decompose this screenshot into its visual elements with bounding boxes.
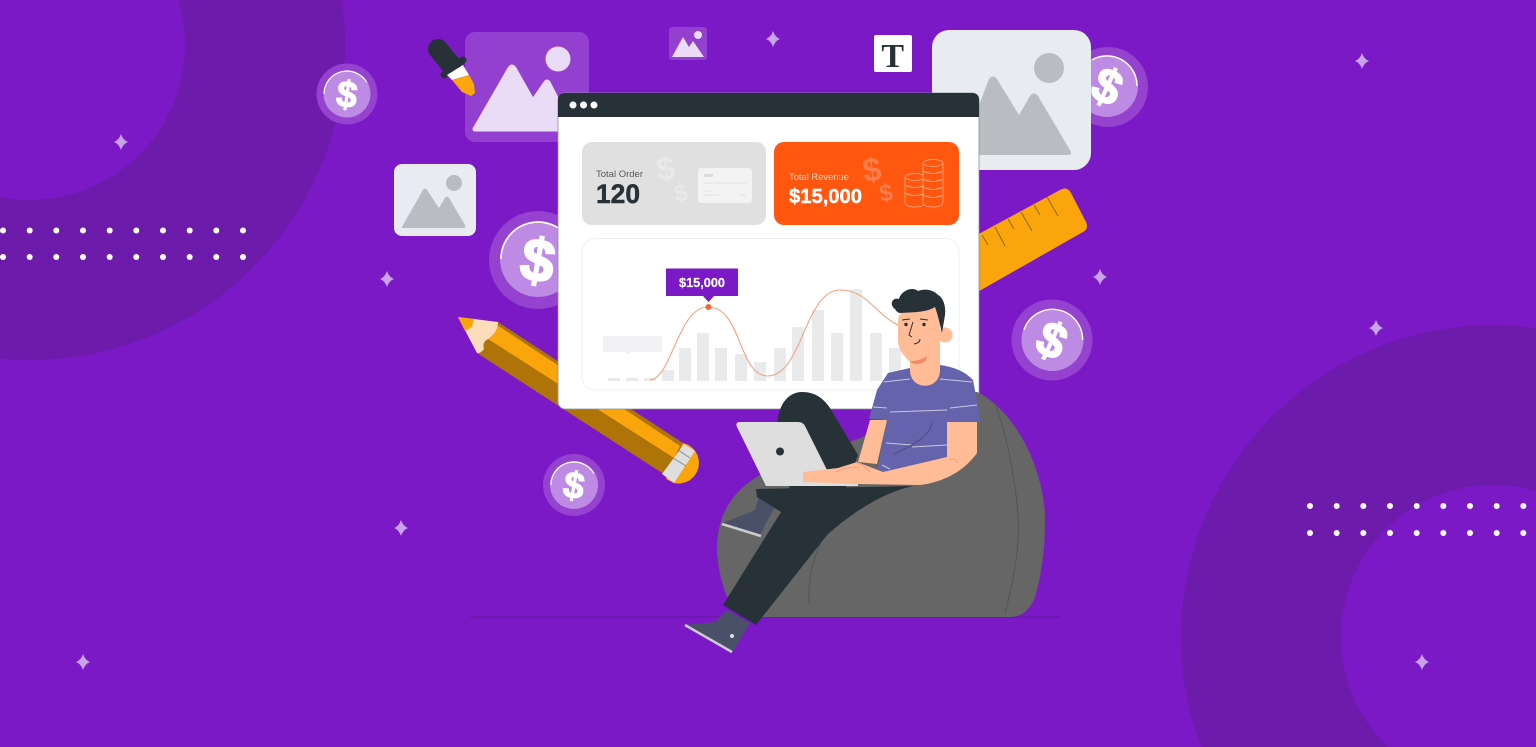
beanbag chair: [717, 390, 1045, 617]
coin: large left: $: [516, 225, 560, 296]
card: total order: $: [654, 149, 677, 188]
chart panel: revenue line and bars: [582, 238, 959, 390]
shirt: [869, 365, 981, 472]
card: total order: Total Order: [596, 169, 643, 180]
background circle: bottom right ring: [1181, 325, 1536, 747]
coin: top left: [316, 64, 378, 124]
window title bar: [558, 93, 979, 117]
card: total revenue: [774, 142, 959, 225]
icon: large purple image placeholder: [465, 32, 589, 142]
tooltip: $15,000: [666, 268, 738, 310]
coin: right: [1012, 300, 1092, 380]
background circle: top left ring: [0, 0, 345, 360]
sparkle stars: [76, 31, 1429, 670]
icon: ruler: [960, 189, 1087, 302]
dot grid: left: [0, 228, 246, 260]
trousers: [723, 392, 913, 625]
coin: top right: $: [1083, 57, 1131, 117]
card: total order: 120: [596, 179, 640, 209]
neck: [910, 350, 940, 386]
card: total order: [582, 142, 766, 225]
tooltip: $15,000: $15,000: [679, 276, 725, 290]
bar chart: [608, 289, 901, 381]
coin: top right: [1068, 47, 1148, 127]
coin: bottom left: $: [560, 464, 588, 508]
faint tooltip: [603, 336, 662, 355]
coin: large left: [489, 211, 587, 309]
card: total revenue: Total Revenue: [789, 172, 849, 183]
icon: small grey image placeholder: [394, 164, 476, 236]
back shoe: [722, 493, 780, 536]
head: [892, 289, 952, 364]
card: total order: $: [673, 179, 690, 208]
panel: browser window dashboard: [558, 93, 979, 409]
card: total revenue: $: [878, 179, 895, 208]
icon: text T tile: T: [881, 38, 904, 75]
icon: pencil: [458, 317, 699, 483]
person sitting with laptop: [685, 289, 981, 653]
coin: bottom left: [543, 454, 605, 516]
floor line: [470, 616, 1060, 618]
dot grid: right: [1307, 503, 1526, 536]
trend line: [650, 290, 900, 380]
front shoe: [685, 610, 750, 653]
coin: top left: $: [334, 73, 360, 116]
forearm and hand: [803, 422, 977, 485]
icon: text T tile: [874, 35, 912, 75]
card: total revenue: $15,000: [789, 186, 862, 208]
coin: right: $: [1028, 311, 1075, 371]
card: total revenue: $: [860, 150, 884, 189]
icon: eye dropper: [438, 49, 475, 96]
laptop: [736, 422, 858, 486]
rear arm: [858, 420, 887, 464]
icon: large grey image placeholder: [932, 30, 1091, 170]
icon: small purple image placeholder: [669, 27, 707, 60]
